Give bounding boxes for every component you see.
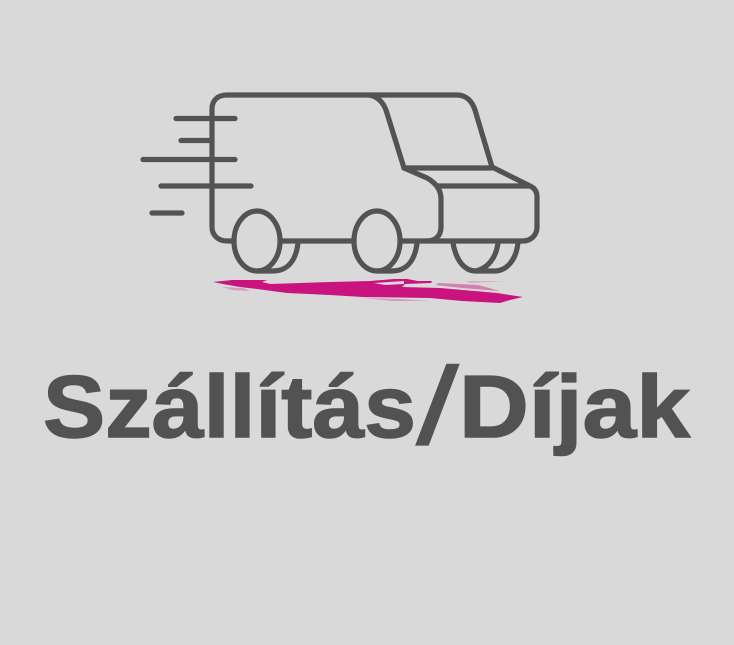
- title: [43, 345, 691, 468]
- icon: delivery van with speed lines: [143, 95, 537, 271]
- rear wheel: [234, 211, 280, 271]
- front wheel arcs: [453, 243, 518, 271]
- cargo and door line: [369, 95, 441, 241]
- middle wheel: [354, 211, 400, 271]
- brush stroke: [213, 279, 523, 303]
- speed lines: [143, 118, 251, 213]
- windshield and hood lines: [404, 168, 530, 186]
- title word: Díjak: Díjak: [459, 357, 691, 456]
- wheel shadows: [257, 243, 417, 271]
- van body outline: [212, 95, 537, 241]
- title word: Szállítás: Szállítás: [43, 357, 416, 456]
- title slash: /: [416, 345, 460, 468]
